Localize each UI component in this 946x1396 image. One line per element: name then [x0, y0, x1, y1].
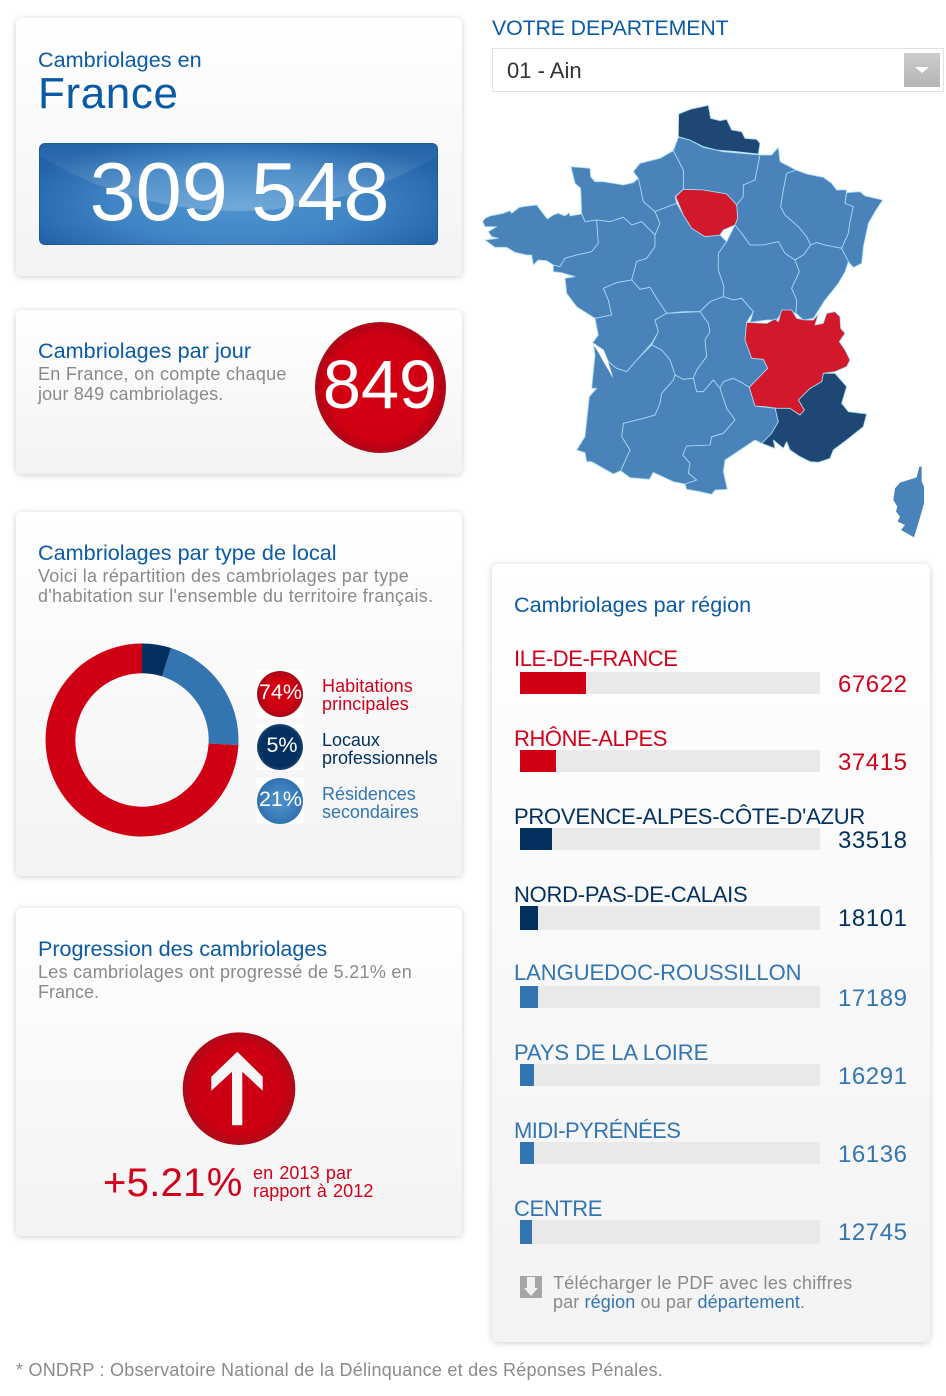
legend: 5%: [256, 724, 304, 770]
panel: progression: [16, 908, 462, 1236]
total counter: [39, 143, 438, 245]
legend: 5%: 5%: [266, 733, 298, 757]
text: progression: Les cambriolages ont progressé de 5.21% en: [38, 962, 412, 982]
heading: Cambriolages en: Cambriolages en: [38, 47, 202, 72]
text: progression: France.: [38, 982, 99, 1002]
row: Midi-Pyrénées: MIDI-PYRÉNÉES: [514, 1118, 680, 1143]
legend label: Locaux professionnels: [322, 730, 438, 768]
lower regions (coordinates from the south crop): [577, 280, 924, 537]
legend label: Habitations principales: principales: [322, 694, 409, 714]
legend label: Habitations principales: [322, 676, 413, 714]
heading: France: France: [38, 69, 179, 118]
legend label: Résidences secondaires: [322, 784, 419, 822]
heading: type of premises: Cambriolages par type de local: [38, 540, 337, 565]
region: Rhône-Alpes: [745, 310, 850, 415]
text: per day: jour 849 cambriolages.: [38, 384, 223, 404]
text: progression: [38, 962, 412, 1002]
text: type of premises: Voici la répartition des cambriolages par type: [38, 566, 409, 586]
text: per day: [38, 364, 287, 404]
value: Ile-de-France: 67622: [838, 671, 908, 698]
text: per day: En France, on compte chaque: [38, 364, 287, 384]
text: en 2013 par rapport à 2012: en 2013 par: [253, 1163, 352, 1183]
row: Languedoc-Roussillon: LANGUEDOC-ROUSSILLON: [514, 960, 802, 985]
panel: France total: [16, 18, 462, 276]
row: Nord-Pas-de-Calais: NORD-PAS-DE-CALAIS: [514, 882, 747, 907]
badge: 849: [314, 322, 446, 453]
icon: up arrow: [182, 1032, 296, 1145]
value: Pays de la Loire: 16291: [838, 1063, 908, 1090]
panel: type of premises: [16, 512, 462, 876]
row: Rhône-Alpes: RHÔNE-ALPES: [514, 726, 667, 751]
value: Centre: 12745: [838, 1219, 908, 1246]
panel: by region: [492, 564, 930, 1342]
legend label: Résidences secondaires: secondaires: [322, 802, 419, 822]
panel: per day: [16, 310, 462, 474]
text: en 2013 par rapport à 2012: [253, 1163, 374, 1201]
icon: download: [520, 1276, 542, 1298]
row: Centre: CENTRE: [514, 1196, 602, 1221]
region: Provence-Alpes-Côte d'Azur: [762, 373, 867, 462]
row: Pays de la Loire: PAYS DE LA LOIRE: [514, 1040, 708, 1065]
total counter: 309 548: [89, 145, 390, 238]
row: Ile-de-France: ILE-DE-FRANCE: [514, 646, 678, 671]
heading: Votre département: VOTRE DEPARTEMENT: [492, 16, 729, 40]
text: PDF download: Télécharger le PDF avec les chiffres: [553, 1273, 853, 1293]
selector value: 01 - Ain: [507, 58, 582, 83]
bar: Nord-Pas-de-Calais: [520, 906, 820, 930]
selector button: [904, 53, 940, 87]
stat: +5.21%: +5.21%: [103, 1161, 243, 1205]
text: type of premises: d'habitation sur l'ensemble du territoire français.: [38, 586, 433, 606]
legend: 21%: [256, 778, 304, 824]
value: Languedoc-Roussillon: 17189: [838, 985, 908, 1012]
legend: 74%: 74%: [259, 680, 302, 704]
bar: Centre: [520, 1220, 820, 1244]
text: PDF download: par région ou par département.: [553, 1292, 805, 1312]
department selector: [492, 48, 944, 92]
legend label: Locaux professionnels: professionnels: [322, 748, 438, 768]
legend: 21%: 21%: [259, 787, 302, 811]
bar: Pays de la Loire: [520, 1064, 820, 1086]
bar: Rhône-Alpes: [520, 750, 820, 772]
text: type of premises: [38, 566, 433, 606]
heading: per day: Cambriolages par jour: [38, 338, 251, 363]
footnote: * ONDRP : Observatoire National de la Délinquance et des Réponses Pénales.: [16, 1360, 663, 1380]
row: PACA: PROVENCE-ALPES-CÔTE-D'AZUR: [514, 804, 865, 829]
value: Rhône-Alpes: 37415: [838, 749, 908, 776]
legend label: Locaux professionnels: Locaux: [322, 730, 380, 750]
value: Midi-Pyrénées: 16136: [838, 1141, 908, 1168]
upper regions (coordinates from the north crop): [483, 137, 883, 322]
bar: PACA: [520, 828, 820, 850]
donut chart: [46, 644, 238, 836]
heading: by region: Cambriolages par région: [514, 592, 751, 617]
bar: Languedoc-Roussillon: [520, 986, 820, 1008]
legend: 74%: [256, 670, 304, 718]
bar: Ile-de-France: [520, 672, 820, 694]
value: Nord-Pas-de-Calais: 18101: [838, 905, 908, 932]
text: en 2013 par rapport à 2012: rapport à 2012: [253, 1181, 374, 1201]
value: PACA: 33518: [838, 827, 908, 854]
region: Ile-de-France: [676, 189, 738, 237]
text: PDF download: [553, 1273, 853, 1312]
legend label: Résidences secondaires: Résidences: [322, 784, 416, 804]
heading: progression: Progression des cambriolages: [38, 936, 327, 961]
bar: Midi-Pyrénées: [520, 1142, 820, 1164]
map of France: [482, 104, 924, 538]
badge: 849: 849: [323, 346, 437, 423]
legend label: Habitations principales: Habitations: [322, 676, 413, 696]
region: Nord-Pas-de-Calais: [678, 105, 760, 154]
